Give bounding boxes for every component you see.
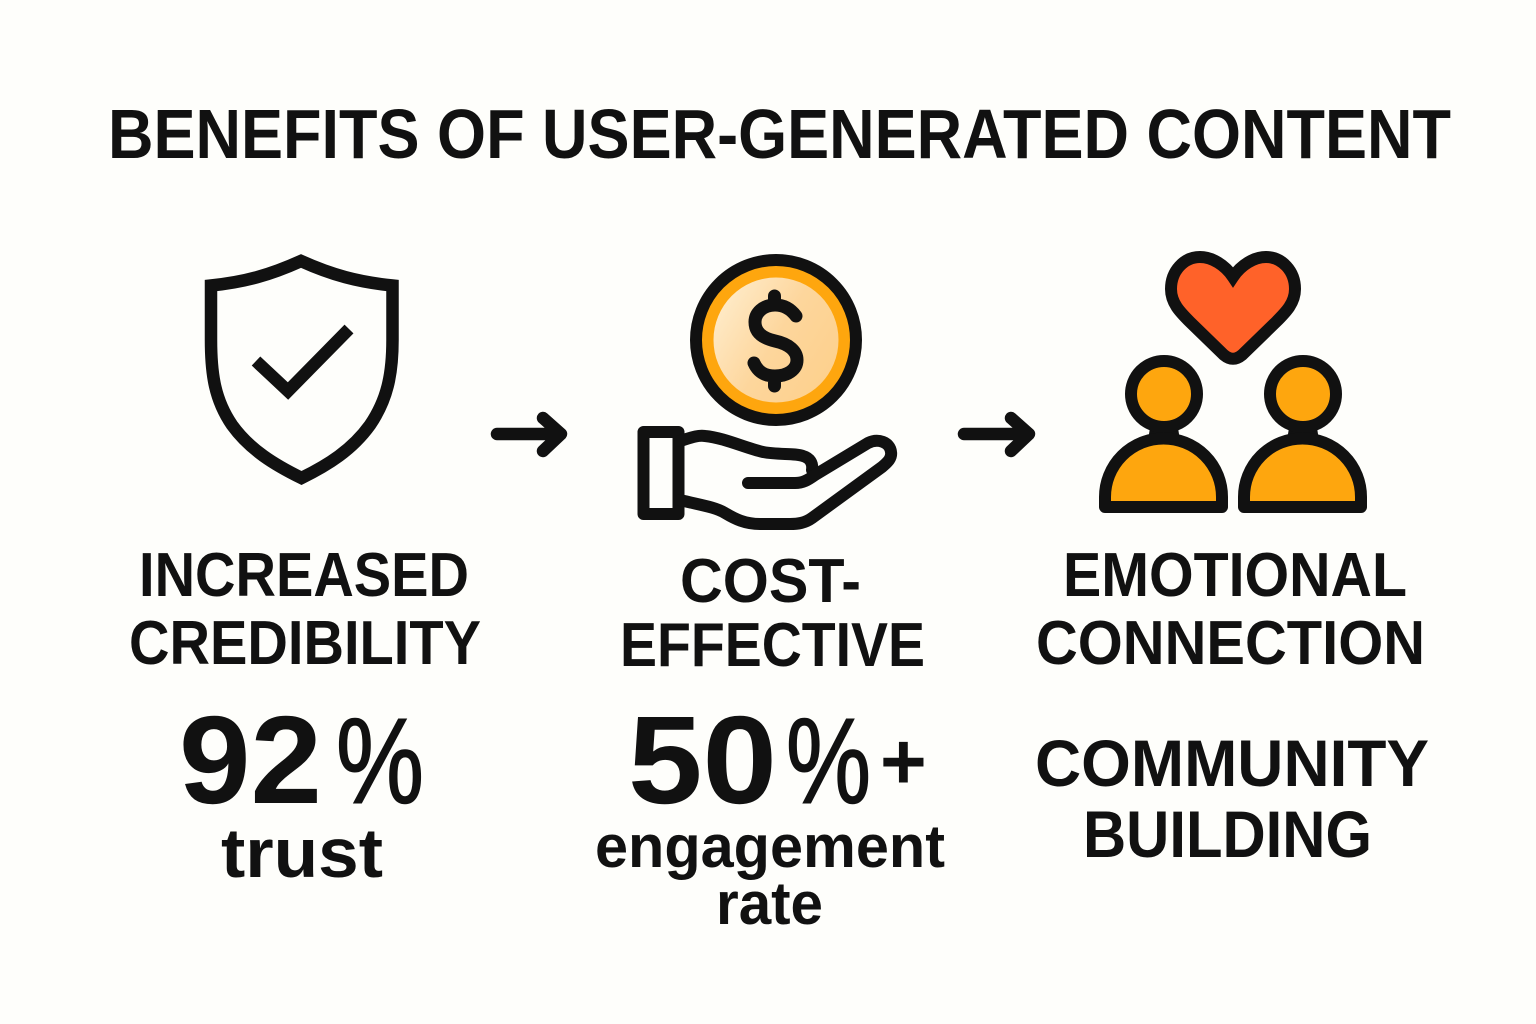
heading: cost-effective bbox=[620, 547, 925, 680]
heading: cost-effective: EFFECTIVE bbox=[620, 611, 925, 680]
heading: emotional connection: EMOTIONAL bbox=[1063, 541, 1407, 610]
heart bbox=[1171, 257, 1295, 359]
heading: emotional connection bbox=[1036, 541, 1425, 678]
stat: 92% trust: 92 bbox=[179, 691, 322, 830]
stat: 50%+ engagement rate: + bbox=[880, 717, 927, 806]
heading: increased credibility: CREDIBILITY bbox=[129, 609, 481, 678]
person right bbox=[1244, 361, 1361, 507]
panel: increased credibility bbox=[129, 261, 481, 892]
person left bbox=[1105, 361, 1222, 507]
heading: increased credibility: INCREASED bbox=[139, 541, 469, 610]
heading: increased credibility bbox=[129, 541, 481, 678]
stat: 50%+ engagement rate: engagement bbox=[595, 813, 945, 880]
icon: coin over open hand bbox=[644, 260, 891, 524]
coin bbox=[696, 260, 856, 420]
stat: 92% trust: trust bbox=[221, 814, 383, 892]
stat: 92% trust bbox=[179, 691, 424, 892]
heading: emotional connection: CONNECTION bbox=[1036, 609, 1425, 678]
icon: heart above two people bbox=[1105, 257, 1361, 507]
subheading: community building: BUILDING bbox=[1083, 797, 1372, 871]
subheading: community building bbox=[1035, 726, 1429, 871]
icon: shield with check mark bbox=[211, 261, 392, 478]
arrow: cost-effective to emotional connection bbox=[964, 418, 1029, 451]
heading: cost-effective: COST- bbox=[680, 547, 861, 616]
stat: 50%+ engagement rate: rate bbox=[716, 870, 823, 937]
stat: 50%+ engagement rate bbox=[595, 691, 945, 937]
stat: 50%+ engagement rate: 50 bbox=[628, 691, 777, 830]
subheading: community building: COMMUNITY bbox=[1035, 726, 1429, 800]
stat: 50%+ engagement rate: % bbox=[786, 693, 871, 829]
stat: 92% trust: % bbox=[336, 693, 424, 829]
panel: emotional connection bbox=[1035, 257, 1429, 871]
open hand bbox=[644, 432, 891, 524]
arrow: credibility to cost-effective bbox=[497, 418, 561, 451]
panel: cost-effective bbox=[595, 260, 945, 937]
